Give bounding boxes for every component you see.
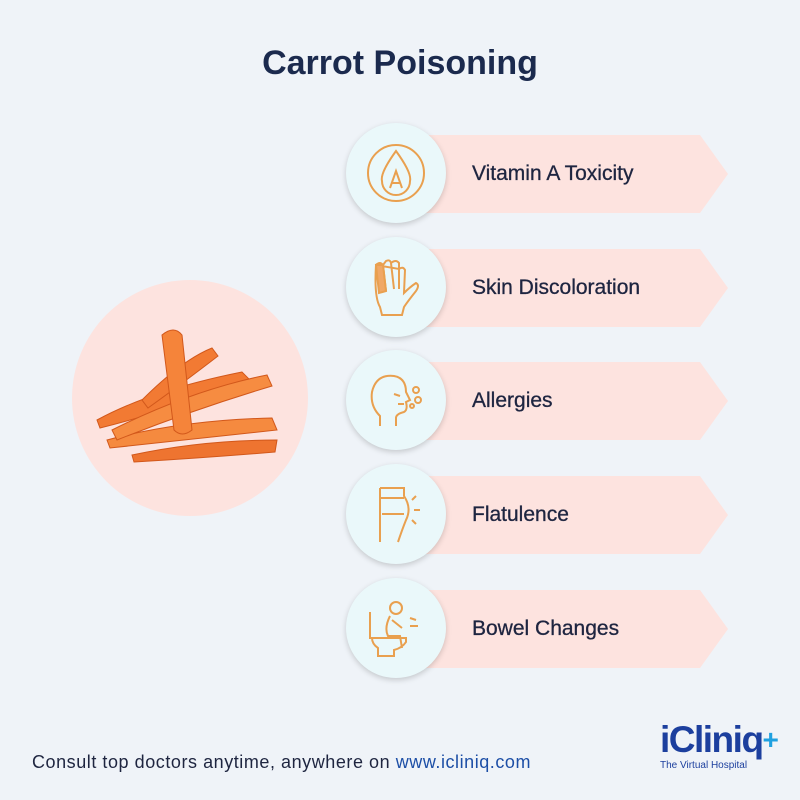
footer text: Consult top doctors anytime, anywhere on www.icliniq.com xyxy=(32,752,531,772)
label: Allergies xyxy=(472,389,553,412)
icon: hand xyxy=(346,237,446,337)
carrot illustration xyxy=(72,280,308,516)
logo: The Virtual Hospital xyxy=(660,760,747,771)
row: vitamin A toxicity xyxy=(344,122,728,228)
row: allergies xyxy=(344,350,728,454)
label: Vitamin A Toxicity xyxy=(472,162,633,185)
icon: vitamin A drop xyxy=(346,123,446,223)
icon: body lower xyxy=(346,464,446,564)
icon: sneezing face xyxy=(346,350,446,450)
row: flatulence xyxy=(344,464,728,568)
label: Bowel Changes xyxy=(472,617,619,640)
title: Carrot Poisoning xyxy=(262,44,538,82)
row: skin discoloration xyxy=(344,236,728,342)
row: bowel changes xyxy=(344,578,728,682)
logo: iCliniq+ xyxy=(660,719,777,760)
label: Flatulence xyxy=(472,503,569,526)
label: Skin Discoloration xyxy=(472,276,640,299)
icon: person on toilet xyxy=(346,578,446,678)
